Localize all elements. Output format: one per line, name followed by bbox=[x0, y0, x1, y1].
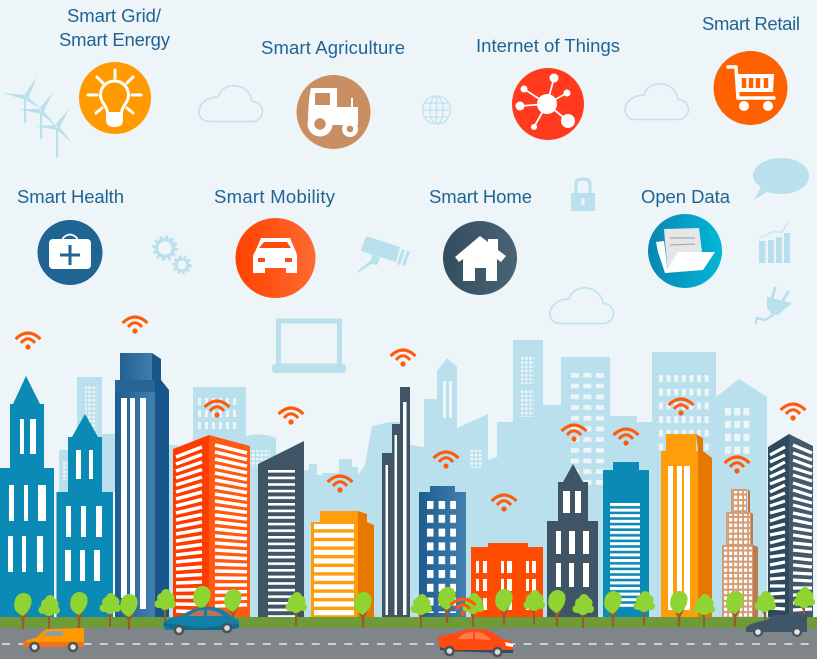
icon: globe bbox=[422, 96, 450, 124]
building: dark striped tower bbox=[768, 434, 813, 617]
icon: medical case bbox=[38, 220, 102, 285]
icon: cloud lower bbox=[550, 288, 614, 324]
icon: cloud left bbox=[199, 86, 262, 122]
label: Open Data: Open Data bbox=[641, 186, 731, 207]
icon: shopping cart bbox=[714, 51, 788, 125]
trees bbox=[14, 586, 815, 630]
wifi signal on tree bbox=[450, 599, 476, 616]
label: Smart Retail: Smart Retail bbox=[702, 13, 800, 34]
car: dark hatchback bbox=[746, 615, 807, 637]
building: dark spire block bbox=[547, 464, 598, 617]
building: teal tower 1 bbox=[0, 376, 54, 617]
label: Smart Grid / Smart Energy: Smart Energy bbox=[59, 29, 171, 50]
icon: internet of things network bbox=[512, 68, 584, 140]
building: blue grid block bbox=[419, 486, 466, 617]
icon: padlock bbox=[571, 179, 595, 211]
icon: light bulb bbox=[79, 62, 151, 134]
grass strip bbox=[0, 617, 817, 628]
label: Smart Grid / Smart Energy: Smart Grid/ bbox=[67, 5, 162, 26]
building: orange tall tower bbox=[661, 434, 712, 617]
car: blue sedan bbox=[163, 607, 239, 635]
road centre dashes bbox=[2, 643, 817, 645]
background skyline bbox=[59, 340, 767, 617]
icon: bar chart bbox=[759, 222, 790, 263]
icon: laptop bbox=[272, 321, 346, 373]
building: red striped tower bbox=[173, 435, 250, 617]
building: dark slanted tower bbox=[258, 441, 304, 617]
wifi signals bbox=[16, 317, 806, 512]
icon: house bbox=[443, 221, 517, 295]
icon: security camera bbox=[358, 236, 410, 273]
building: dark thin tower bbox=[382, 387, 410, 617]
icon: speech bubble bbox=[753, 158, 809, 200]
icon: wind turbines bbox=[3, 77, 72, 157]
label: Smart Home: Smart Home bbox=[429, 186, 532, 207]
background building windows bbox=[62, 357, 751, 491]
icon: tractor bbox=[296, 75, 370, 149]
car: red sedan bbox=[438, 629, 513, 657]
road bbox=[0, 628, 817, 659]
building: tan stepped tower bbox=[722, 489, 758, 617]
label: Internet of Things: Internet of Things bbox=[476, 35, 620, 56]
icon: cloud middle right bbox=[625, 84, 688, 120]
building: teal striped block bbox=[603, 462, 649, 617]
label: Smart Health: Smart Health bbox=[17, 186, 124, 207]
icon: car bbox=[236, 218, 316, 298]
building: red low block bbox=[471, 543, 543, 617]
icon: plug bbox=[756, 288, 792, 323]
building: orange block bbox=[311, 511, 374, 617]
label: Smart Grid / Smart Energy bbox=[59, 5, 171, 50]
building: teal tower 2 bbox=[56, 414, 113, 617]
car: orange van bbox=[23, 628, 84, 652]
icon: gears bbox=[154, 236, 190, 274]
building: tall blue skyscraper bbox=[115, 353, 169, 617]
icon: open folder bbox=[648, 214, 722, 288]
label: Smart Mobility: Smart Mobility bbox=[214, 186, 336, 207]
label: Smart Agriculture: Smart Agriculture bbox=[261, 37, 405, 58]
gaps between left towers bbox=[54, 492, 115, 617]
